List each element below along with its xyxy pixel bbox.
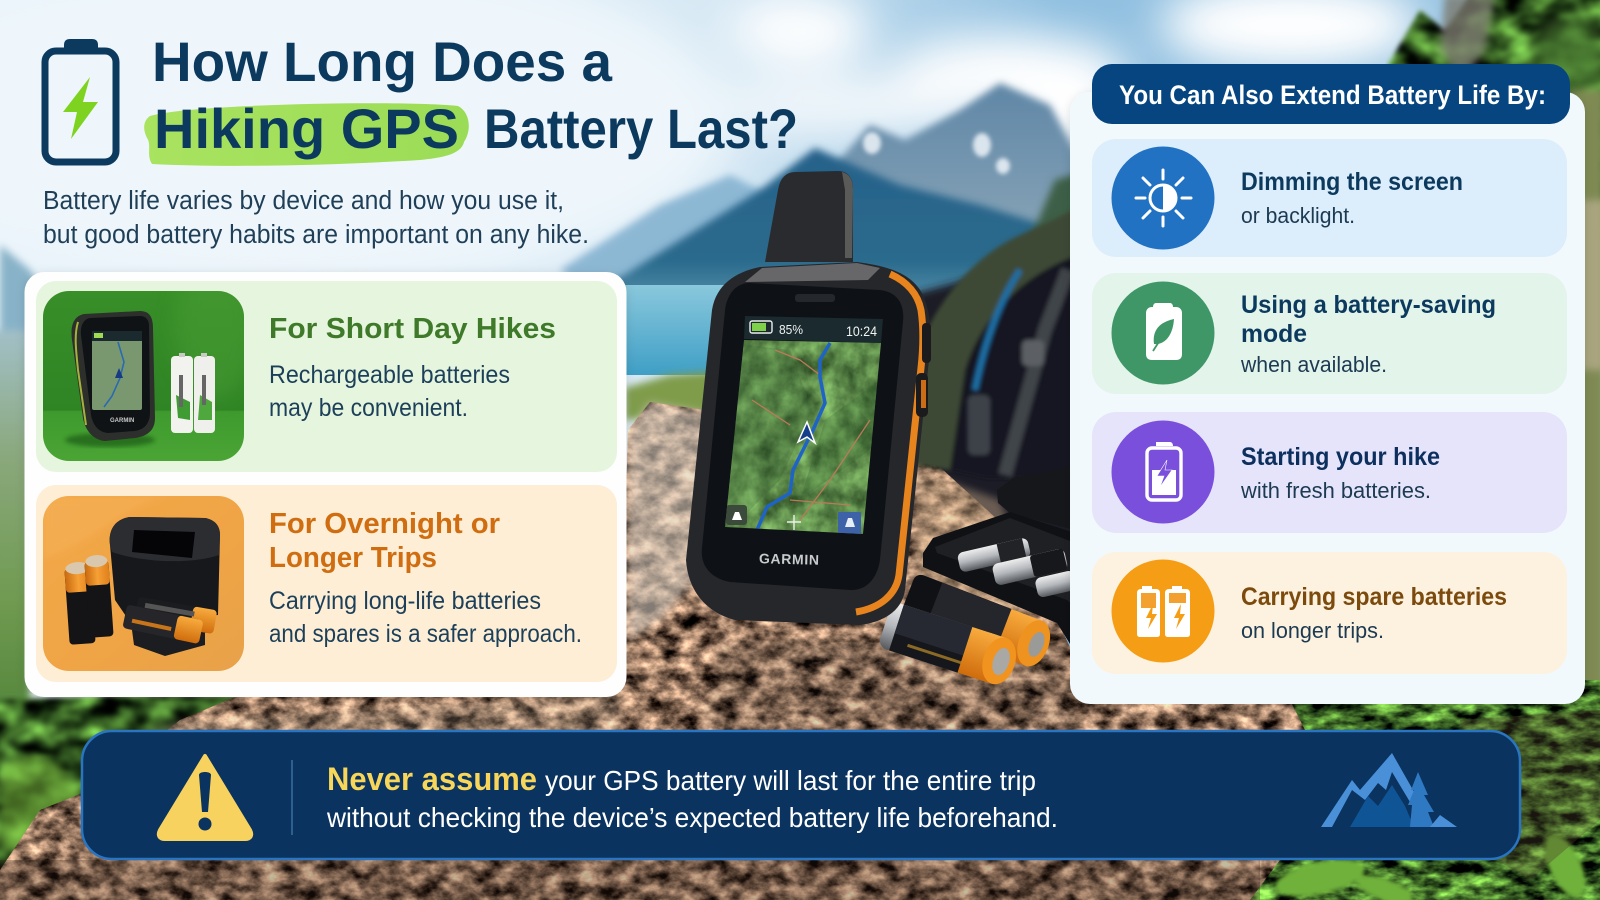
icon: two spare batteries [1112, 560, 1214, 662]
tip: battery-saving mode: mode [1241, 320, 1307, 348]
tip: dimming the screen [1092, 139, 1567, 257]
subtitle: Battery life varies by device and how you use it, [43, 187, 564, 215]
loose batteries [878, 573, 1056, 689]
icon: battery with leaf [1112, 282, 1214, 384]
icon: half sun [1112, 146, 1214, 250]
tip: fresh batteries: Starting your hike [1241, 443, 1440, 471]
tip: fresh batteries: with fresh batteries. [1240, 478, 1431, 503]
warning banner [82, 731, 1520, 859]
text: short day hikes [269, 313, 556, 422]
tip: fresh batteries [1092, 412, 1567, 533]
brand name: GARMIN [759, 550, 819, 568]
backpack [905, 208, 1078, 478]
text: overnight or longer trips: Longer Trips [269, 542, 437, 574]
screen bezel [702, 283, 903, 590]
status bar [744, 316, 883, 343]
text: short day hikes: Rechargeable batteries [269, 361, 510, 389]
image: handheld GPS and rechargeable batteries [43, 291, 244, 461]
warning text: without checking the device’s expected battery life beforehand. [326, 802, 1058, 833]
text: overnight or longer trips [269, 508, 582, 648]
antenna [765, 171, 853, 262]
text: overnight or longer trips: Carrying long-life batteries [269, 587, 541, 615]
side buttons [916, 323, 931, 417]
warning text: your GPS battery will last for the entire trip [545, 765, 1036, 796]
subtitle: but good battery habits are important on any hike. [43, 221, 589, 249]
text: short day hikes: may be convenient. [269, 394, 468, 422]
orange side stripe [856, 274, 923, 612]
body [686, 262, 930, 625]
green highlight behind Hiking GPS [144, 103, 469, 166]
tip: battery-saving mode [1092, 273, 1567, 394]
text: overnight or longer trips: and spares is a safer approach. [269, 620, 582, 648]
tip: spare batteries [1092, 552, 1567, 674]
card: short day hikes [36, 260, 617, 472]
status bar: 10:24 [846, 323, 877, 339]
tip: spare batteries: on longer trips. [1241, 618, 1384, 643]
dark fill behind backpack [890, 250, 1080, 570]
warning text: Never assume [327, 761, 537, 797]
tip: spare batteries: Carrying spare batteries [1241, 583, 1507, 611]
icon: warning triangle [159, 756, 251, 839]
tip: dimming the screen: Dimming the screen [1241, 168, 1463, 196]
image: handheld GPS and rechargeable batteries: GARMIN [110, 418, 134, 424]
title [144, 30, 798, 166]
panel: extend battery life [1070, 64, 1585, 704]
tip: battery-saving mode: when available. [1240, 352, 1387, 377]
tip: dimming the screen: or backlight. [1241, 203, 1355, 228]
header: You Can Also Extend Battery Life By: [1119, 80, 1546, 110]
title: Battery Last? [484, 97, 798, 160]
icon: charged battery [1112, 420, 1214, 524]
title icon: battery with bolt [45, 39, 116, 162]
header [1092, 64, 1570, 124]
warning text [326, 761, 1058, 833]
title: Hiking GPS [154, 97, 459, 160]
status bar: 85% [779, 322, 803, 337]
tip: battery-saving mode: Using a battery-saving [1241, 291, 1496, 319]
image: black case and long-life batteries [43, 496, 244, 671]
text: overnight or longer trips: For Overnight or [269, 508, 500, 540]
title: How Long Does a [152, 30, 613, 93]
card: overnight or longer trips [36, 485, 617, 682]
text: short day hikes: For Short Day Hikes [269, 313, 556, 345]
panel: trip type cards [24, 260, 626, 697]
GPS device [686, 171, 931, 625]
map screen [720, 338, 885, 538]
subtitle [43, 187, 589, 249]
battery case with spare batteries [923, 466, 1078, 652]
icon: mountain [1321, 753, 1457, 827]
